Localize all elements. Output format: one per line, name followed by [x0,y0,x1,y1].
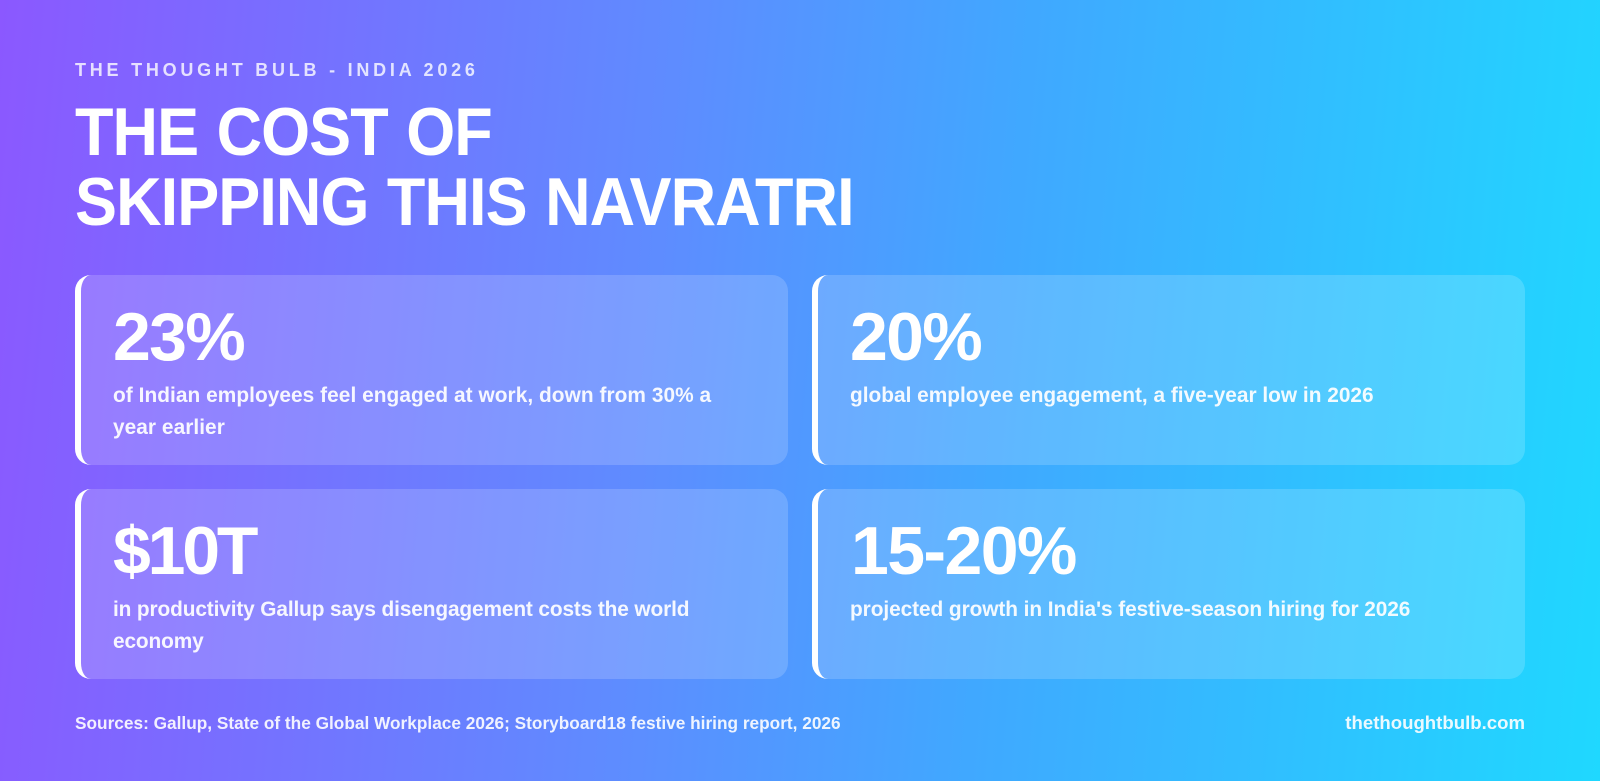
title [75,94,854,240]
description: in productivity Gallup says disengagement costs the world economy [113,598,689,653]
title: SKIPPING THIS NAVRATRI [75,164,854,240]
description: projected growth in India's festive-season hiring for 2026 [850,598,1410,621]
eyebrow label: THE THOUGHT BULB - INDIA 2026 [75,60,479,80]
panel: engaged employees in India [75,275,788,465]
stat: $10T [113,513,255,589]
title: THE COST OF [75,94,492,170]
stat: 15-20% [851,513,1076,589]
panel: productivity cost [75,489,788,679]
panel: festive hiring [812,489,1525,679]
sources: Sources: Gallup, State of the Global Workplace 2026; Storyboard18 festive hiring report, 2026 [75,713,841,733]
description: of Indian employees feel engaged at work, down from 30% a year earlier [113,384,711,439]
description: global employee engagement, a five-year low in 2026 [850,384,1374,407]
stat: 23% [113,299,244,375]
website: thethoughtbulb.com [1345,712,1525,733]
stat: 20% [850,299,981,375]
panel: global engagement [812,275,1525,465]
